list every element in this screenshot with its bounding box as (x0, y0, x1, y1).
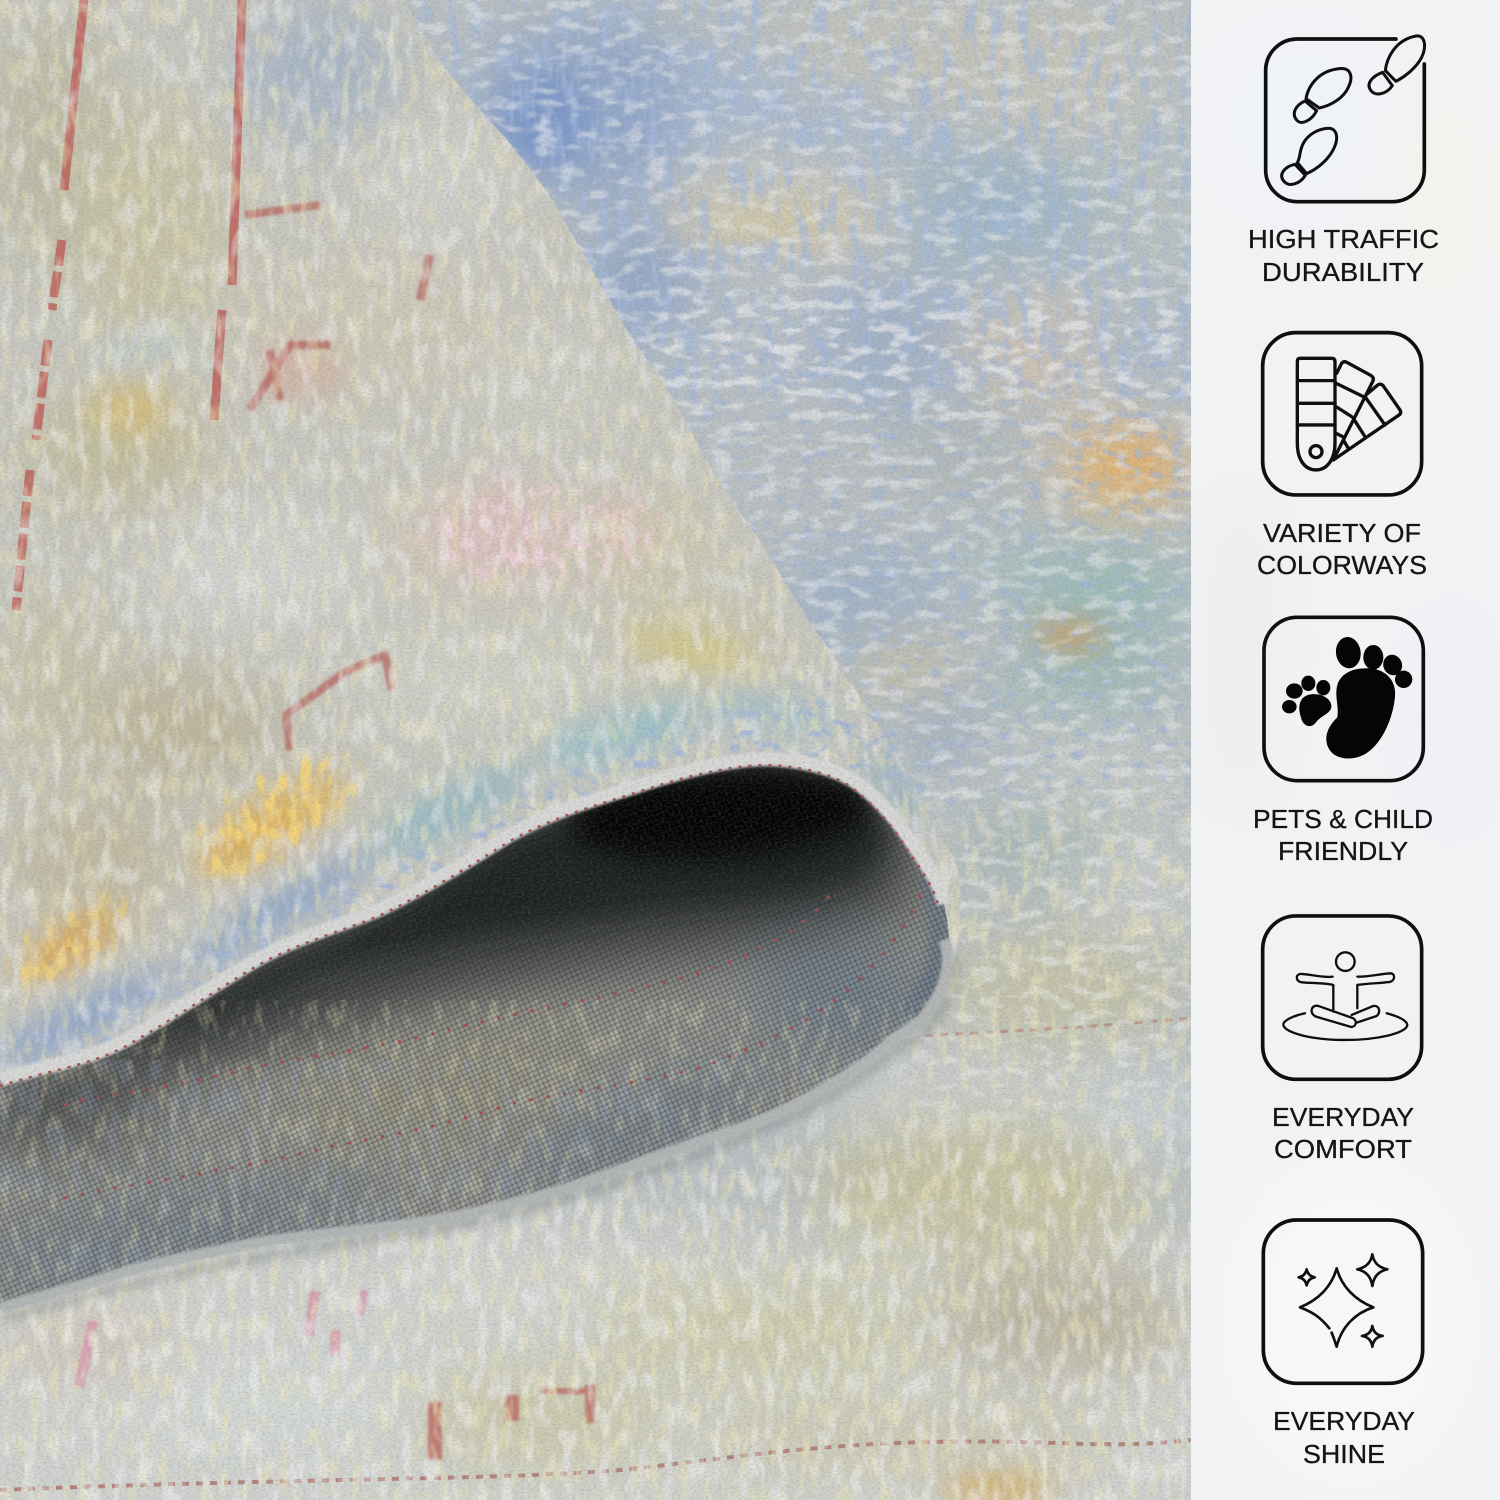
label: everyday shine (1273, 1406, 1415, 1469)
label: everyday shine: EVERYDAY (1273, 1406, 1415, 1436)
label: pets and child friendly (1253, 804, 1433, 866)
label: everyday comfort (1272, 1102, 1414, 1164)
panel: features (1191, 0, 1500, 1500)
label: high traffic durability: HIGH TRAFFIC (1248, 224, 1439, 254)
label: everyday comfort: EVERYDAY (1272, 1102, 1414, 1132)
roll woven threads (0, 0, 1000, 1100)
label: pets and child friendly: FRIENDLY (1278, 836, 1408, 866)
label: everyday shine: SHINE (1303, 1439, 1385, 1469)
label: everyday comfort: COMFORT (1274, 1134, 1412, 1164)
label: high traffic durability: DURABILITY (1262, 257, 1424, 287)
red woven stripes (16, 0, 242, 610)
icon: sparkles (1263, 1220, 1423, 1383)
label: pets and child friendly: PETS & CHILD (1253, 804, 1433, 834)
underside lower edge (0, 940, 947, 1308)
icon: paw and child foot (1264, 617, 1423, 781)
label: variety of colorways: VARIETY OF (1263, 518, 1421, 548)
icon: seated figure meditating (1263, 916, 1422, 1079)
panel background (1191, 0, 1500, 1500)
floor woven threads (0, 0, 1191, 1500)
icon: footprints (1266, 36, 1425, 202)
roll upper lip edge (0, 759, 944, 1080)
shadow under roll (0, 960, 955, 1320)
underside threads (0, 1000, 960, 1320)
fine woven texture (0, 0, 1191, 1500)
rug roll top surface (0, 0, 1000, 1100)
label: high traffic durability (1248, 224, 1439, 287)
rug underside (0, 764, 949, 1308)
label: variety of colorways: COLORWAYS (1257, 550, 1427, 580)
label: variety of colorways (1257, 518, 1427, 580)
icon: colour swatch fan (1263, 333, 1422, 495)
